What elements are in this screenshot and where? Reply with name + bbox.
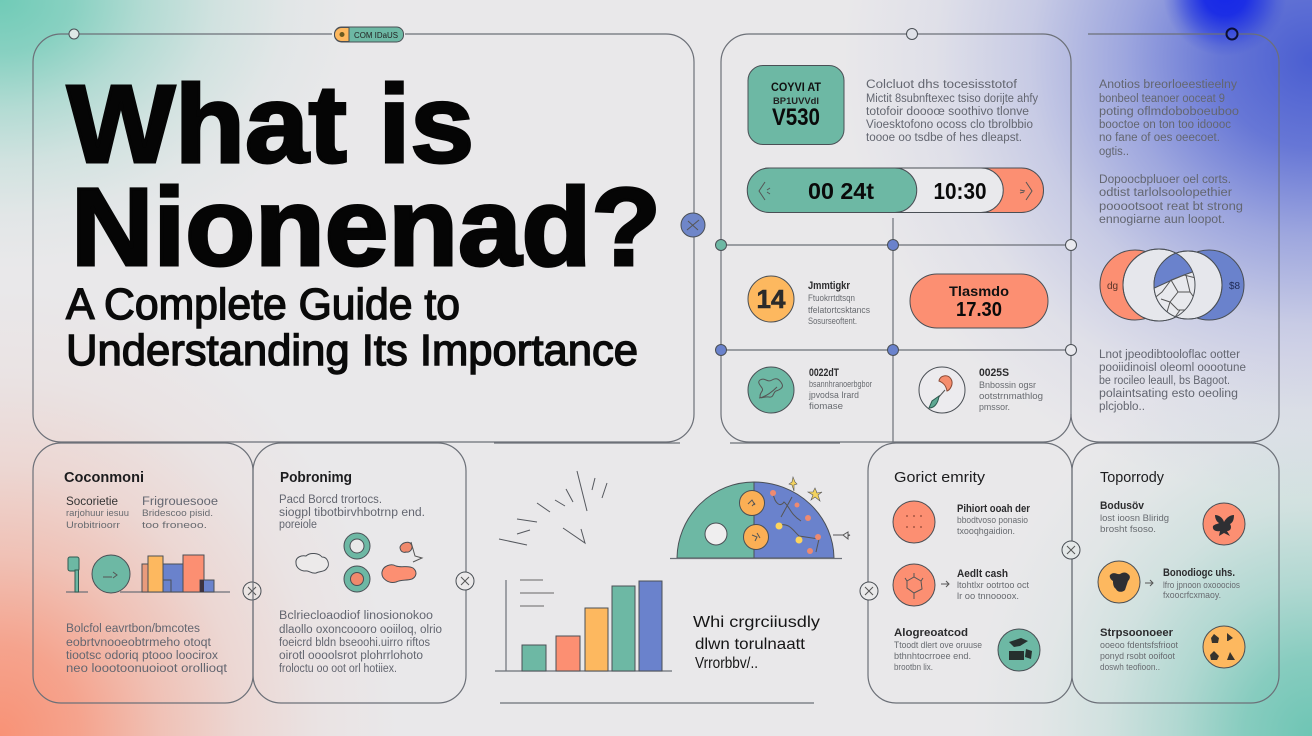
half-circle diagram bbox=[670, 477, 850, 558]
venn diagram: $8 bbox=[1229, 281, 1241, 292]
item 1 bbox=[1100, 500, 1245, 545]
stat: coral pill: Tlasmdo bbox=[949, 283, 1009, 299]
two-column text: too froneoo. bbox=[142, 520, 207, 531]
stat: yellow circle: Sosurseoftent. bbox=[808, 316, 857, 327]
two-column text bbox=[66, 496, 218, 531]
item 3: bthnhtocrroee end. bbox=[894, 651, 971, 662]
item 3: ponyd rsobt ooifoot bbox=[1100, 651, 1175, 662]
sunburst lines bbox=[499, 471, 607, 545]
item: teal leaf icon: fiomase bbox=[809, 401, 843, 412]
callout text bbox=[693, 614, 820, 672]
item 2: lr oo tnnoooox. bbox=[957, 591, 1019, 602]
connector node bbox=[860, 582, 878, 600]
subtitle bbox=[66, 280, 638, 375]
heading: Coconmoni bbox=[64, 470, 144, 486]
item 1: Bodusöv bbox=[1100, 500, 1145, 512]
text block: first note: Anotios breorloeestieelny bbox=[1099, 79, 1237, 91]
item 1: txooqhgaidion. bbox=[957, 526, 1015, 537]
item 2: lfro jpnoon oxooocios bbox=[1163, 580, 1240, 591]
stat card: green bbox=[748, 66, 844, 144]
heading: Pobronimg bbox=[280, 470, 352, 486]
item: teal leaf icon: jpvodsa Irard bbox=[808, 390, 859, 401]
item 1: brosht fsoso. bbox=[1100, 524, 1156, 535]
item 1 bbox=[893, 501, 1031, 543]
panel: bottom far right topic bbox=[1072, 443, 1279, 703]
text block: first note: ogtis.. bbox=[1099, 146, 1129, 158]
item 1: bbodtvoso ponasio bbox=[957, 515, 1028, 526]
item 1: lost ioosn Bliridg bbox=[1100, 513, 1169, 524]
item 3 bbox=[894, 627, 1040, 673]
item: teal leaf icon: 0022dT bbox=[809, 367, 839, 379]
heading: Toporrody bbox=[1100, 470, 1165, 486]
item 2 bbox=[1098, 561, 1240, 603]
text block: neo loootoonuoioot orollioqt bbox=[66, 663, 228, 675]
text block: card description: Vioesktofono ocoss clo tbrolbbio bbox=[866, 119, 1033, 131]
connector node bbox=[243, 582, 261, 600]
text block: eobrtvnooeobtrmeho otoqt bbox=[66, 637, 212, 649]
callout text: dlwn torulnaatt bbox=[695, 636, 806, 653]
text block: first note bbox=[1099, 79, 1239, 158]
panel: title bbox=[33, 27, 694, 442]
connector node: blue bbox=[681, 213, 705, 237]
two-column text: Urobitrioorr bbox=[66, 520, 120, 531]
two-column text: rarjohuur iesuu bbox=[66, 508, 129, 519]
text block: second note: ennogiarne aun loopot. bbox=[1099, 214, 1225, 226]
illustration: post, circle and buildings bbox=[66, 555, 230, 593]
timer pill: 00 24t bbox=[808, 178, 874, 204]
item 3: doswh teofioon.. bbox=[1100, 662, 1160, 673]
item 3: ooeoo fdentsfsfrioot bbox=[1100, 640, 1178, 651]
stat: yellow circle: tfelatortcsktancs bbox=[808, 305, 870, 316]
stat: coral pill bbox=[910, 274, 1048, 328]
item: teal leaf icon bbox=[748, 367, 872, 413]
two-column text: Socorietie bbox=[66, 496, 118, 508]
panel: central charts bbox=[494, 443, 850, 703]
heading: main title: Nionenad? bbox=[71, 166, 661, 289]
item 2: Aedlt cash bbox=[957, 568, 1008, 580]
item: mushroom icon bbox=[919, 367, 1043, 413]
text block: dlaollo oxoncoooro ooiiloq, olrio bbox=[279, 624, 442, 636]
badge: COM IDaUS bbox=[354, 31, 398, 40]
stat: yellow circle: 14 bbox=[757, 284, 786, 314]
stat: yellow circle: Ftuokrrtdtsqn bbox=[808, 293, 855, 304]
text block: card description: totofoir doooœ soothivo tlonve bbox=[866, 106, 1029, 118]
connector node bbox=[1062, 541, 1080, 559]
subtitle: Understanding Its Importance bbox=[66, 326, 638, 375]
callout text: Vrrorbbv/.. bbox=[695, 655, 758, 672]
heading: main title: What is bbox=[67, 63, 474, 186]
text block: third note bbox=[1099, 349, 1246, 413]
text block: second note: odtist tarlolsoolopethier bbox=[1099, 187, 1232, 199]
item 3: Strpsoonoeer bbox=[1100, 627, 1174, 639]
panel: metrics grid bbox=[716, 28, 1076, 442]
text block: third note: polaintsating esto oeoling bbox=[1099, 388, 1238, 400]
text block: Bolcfol eavrtbon/bmcotes bbox=[66, 623, 200, 635]
item 2 bbox=[893, 564, 1029, 606]
item: teal leaf icon: bsannhranoerbgbor bbox=[809, 379, 872, 390]
item 1: Pihiort ooah der bbox=[957, 503, 1031, 515]
text block: Pacd Borcd trortocs. bbox=[279, 494, 382, 506]
venn diagram: dg bbox=[1107, 281, 1118, 292]
badge bbox=[334, 27, 404, 42]
text block: first note: booctoe on ton too idoooc bbox=[1099, 119, 1231, 131]
connector node bbox=[456, 572, 474, 590]
text block: second note: pooootsoot reat bt strong bbox=[1099, 201, 1243, 213]
panel: bottom right social bbox=[868, 443, 1072, 703]
two-column text: Frigrouesooe bbox=[142, 496, 218, 508]
text block: siogpl tibotbirvhbotrnp end. bbox=[279, 507, 425, 519]
item: mushroom icon: ootstrnmathlog bbox=[979, 391, 1043, 402]
text block: poreiole bbox=[279, 519, 317, 531]
text block: card description: Mictit 8subnftexec tsiso dorijte ahfy bbox=[866, 93, 1038, 105]
text block: froloctu oo oot orl hotiiex. bbox=[279, 663, 397, 675]
text block: card description: toooe oo tsdbe of hes dleapst. bbox=[866, 132, 1022, 144]
text block: Bclriecloaodiof linosionokoo bbox=[279, 610, 433, 622]
item 3: Alogreoatcod bbox=[894, 627, 968, 639]
text block: card description: Colcluot dhs tocesisstotof bbox=[866, 79, 1018, 91]
item: mushroom icon: Bnbossin ogsr bbox=[979, 380, 1036, 391]
callout text: Whi crgrciiusdly bbox=[693, 614, 820, 631]
text block: third note: plcjoblo.. bbox=[1099, 401, 1145, 413]
heading: main title bbox=[67, 63, 661, 289]
text block bbox=[279, 610, 442, 675]
text block: first note: no fane of oes oeecoet. bbox=[1099, 132, 1220, 144]
text block bbox=[66, 623, 228, 675]
panel: notes with venn diagram bbox=[1071, 28, 1279, 442]
stat card: green: BP1UVVdl bbox=[773, 96, 819, 107]
item 2: Bonodiogc uhs. bbox=[1163, 567, 1235, 579]
item 2: fxoocrfcxmaoy. bbox=[1163, 590, 1221, 601]
item 3: Ttoodt dlert ove oruuse bbox=[894, 640, 982, 651]
panel: bottom problem bbox=[253, 443, 466, 703]
text block bbox=[279, 494, 425, 531]
item: mushroom icon: 0025S bbox=[979, 367, 1009, 379]
text block: foeicrd bldn bseoohi.uirro riftos bbox=[279, 637, 430, 649]
stat: coral pill: 17.30 bbox=[956, 299, 1002, 321]
item 2: ltohtlxr ootrtoo oct bbox=[957, 580, 1029, 591]
timer pill bbox=[747, 168, 1044, 212]
stat: yellow circle: Jmmtigkr bbox=[808, 280, 851, 292]
item 3 bbox=[1100, 626, 1245, 673]
two-column text: Bridescoo pisid. bbox=[142, 508, 213, 519]
text block: third note: Lnot jpeodibtooloflac ootter bbox=[1099, 349, 1240, 361]
text block: tiootsc odoriq ptooo loocirox bbox=[66, 650, 218, 662]
text block: third note: pooiidinoisl oleoml ooootune bbox=[1099, 362, 1246, 374]
text block: oirotl oooolsrot plohrrlohoto bbox=[279, 650, 423, 662]
text block: first note: poting oflmdoboboeuboo bbox=[1099, 106, 1239, 118]
item 3: brootbn lix. bbox=[894, 662, 933, 673]
text block: second note: Dopoocbpluoer oel corts. bbox=[1099, 174, 1231, 186]
venn diagram bbox=[1100, 245, 1244, 325]
stat card: green: V530 bbox=[772, 104, 820, 131]
panel: bottom economic bbox=[33, 443, 253, 703]
illustration: biology icons bbox=[296, 533, 422, 592]
sparkles bbox=[808, 488, 822, 501]
stat: yellow circle bbox=[748, 276, 870, 327]
text block: second note bbox=[1099, 174, 1243, 226]
item: mushroom icon: pmssor. bbox=[979, 402, 1010, 413]
text block: third note: be rocileo leaull, bs Bagoot. bbox=[1099, 375, 1230, 387]
timer pill: 10:30 bbox=[934, 178, 986, 204]
subtitle: A Complete Guide to bbox=[66, 280, 460, 329]
bar chart bbox=[495, 580, 672, 671]
text block: first note: bonbeol teanoer ooceat 9 bbox=[1099, 93, 1225, 105]
text block: card description bbox=[866, 79, 1038, 144]
stat card: green: COYVI AT bbox=[771, 82, 821, 94]
heading: Gorict emrity bbox=[894, 470, 986, 486]
